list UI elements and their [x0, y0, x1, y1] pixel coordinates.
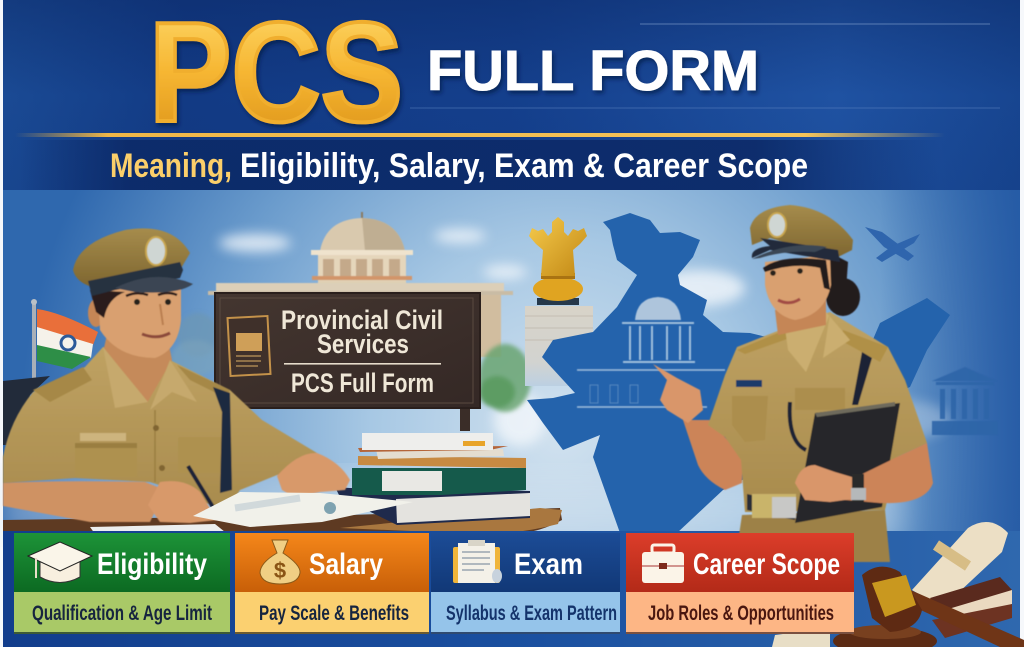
gavel head	[862, 567, 922, 632]
salary sub-label: Pay Scale & Benefits	[259, 602, 409, 625]
eligibility sub-label: Qualification & Age Limit	[32, 602, 212, 625]
woman pointing arm	[683, 420, 742, 490]
ashoka emblem statue	[525, 217, 593, 386]
woman pants	[735, 510, 890, 562]
card: Salary	[235, 533, 429, 634]
gavel handle	[895, 588, 1024, 647]
man arms and hands	[3, 481, 165, 522]
officer: man	[3, 228, 350, 523]
signboard: Provincial Civil Services	[215, 293, 480, 431]
exam label: Exam	[514, 548, 583, 581]
gavel block	[833, 625, 937, 647]
government building behind sign	[208, 212, 513, 357]
scene background: sky	[3, 188, 1020, 540]
bottom strip	[3, 531, 1020, 647]
sign text line 1: Provincial Civil	[281, 305, 443, 335]
woman shirt	[708, 312, 927, 512]
icon: money bag	[260, 540, 300, 584]
law books	[930, 577, 1012, 638]
temple icon	[932, 367, 998, 435]
map building watermark	[577, 297, 725, 407]
subtitle: topics: Eligibility, Salary, Exam & Career Scope	[240, 147, 808, 185]
man neck and head	[104, 330, 172, 403]
icon: briefcase	[642, 545, 684, 583]
exam sub-label: Syllabus & Exam Pattern	[446, 602, 617, 625]
woman holding arm	[845, 443, 933, 503]
clouds	[219, 229, 950, 446]
woman head	[826, 278, 860, 316]
man uniform	[3, 347, 317, 512]
woman folder	[795, 403, 900, 523]
icon: money bag: $	[274, 558, 286, 583]
scroll	[912, 522, 1008, 608]
eligibility label: Eligibility	[97, 548, 207, 581]
india map	[527, 213, 950, 533]
gavel and books	[772, 522, 1024, 647]
sign text line 2: Services	[317, 329, 409, 359]
airplane silhouette	[865, 227, 920, 262]
trees	[171, 313, 531, 412]
salary label: Salary	[309, 548, 383, 581]
icon: graduation cap	[28, 542, 92, 582]
book stack	[335, 433, 530, 525]
career label: Career Scope	[693, 548, 840, 581]
card: Eligibility	[14, 533, 230, 634]
subtitle: Meaning: Meaning,	[110, 147, 232, 185]
title band	[3, 0, 1020, 190]
card: Exam	[431, 533, 620, 634]
sign document icon	[228, 316, 270, 376]
card: Career Scope	[626, 533, 854, 634]
woman belt	[747, 494, 795, 520]
woman cap	[750, 205, 853, 257]
career sub-label: Job Roles & Opportunities	[648, 602, 834, 625]
chair	[3, 376, 50, 445]
open notebook	[193, 492, 413, 527]
officer: woman	[653, 205, 933, 562]
icon: clipboard	[453, 540, 502, 583]
flag	[31, 299, 98, 378]
man cap	[73, 228, 190, 287]
desk	[3, 508, 562, 534]
heading: FULL FORM: FULL FORM	[427, 39, 759, 103]
sign text line 3: PCS Full Form	[291, 368, 434, 398]
